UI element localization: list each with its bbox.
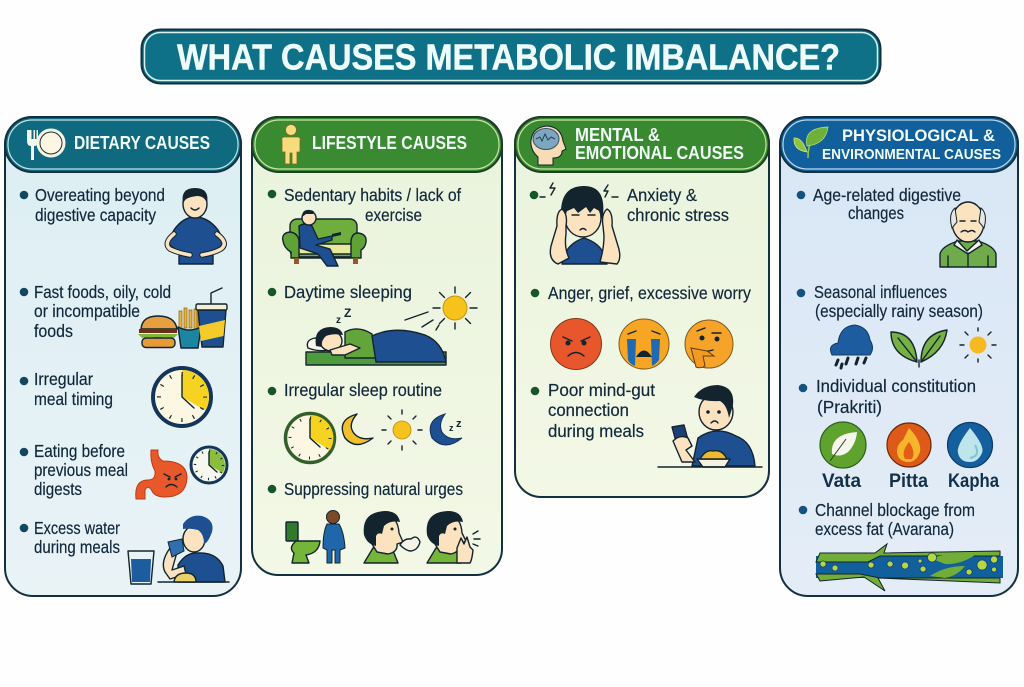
item: fast foods xyxy=(20,282,227,348)
header text: DIETARY CAUSES xyxy=(74,133,210,153)
header: mental and emotional causes xyxy=(515,117,769,172)
label: pitta: Pitta xyxy=(889,471,928,492)
item: eating before digestion: digests xyxy=(34,479,82,499)
icon: head with brain xyxy=(531,126,566,165)
item: irregular meal timing: meal timing xyxy=(34,389,113,409)
item: seasonal influences xyxy=(797,282,996,368)
icon: person standing xyxy=(323,510,345,563)
item: irregular meal timing xyxy=(20,368,211,426)
item: excess water: Excess water xyxy=(34,518,120,538)
item: eating before digestion: Eating before xyxy=(34,441,125,461)
item: sedentary habits: exercise xyxy=(365,205,422,225)
header text: ENVIRONMENTAL CAUSES xyxy=(822,146,1001,163)
item: eating before digestion xyxy=(20,441,227,499)
icon: small clock xyxy=(191,447,227,483)
item: excess water xyxy=(20,516,229,584)
title banner xyxy=(142,30,880,84)
icon: man eating with phone xyxy=(658,385,762,467)
item: fast foods: or incompatible xyxy=(34,301,140,321)
icon: man drinking water xyxy=(158,516,229,582)
item: eating before digestion: previous meal xyxy=(34,460,128,480)
item: individual constitution: (Prakriti) xyxy=(817,397,882,417)
item: age-related changes: changes xyxy=(848,203,904,223)
icon: sun xyxy=(960,328,996,362)
icon: blue moon with z: z xyxy=(449,423,454,433)
item: overeating: digestive capacity xyxy=(35,205,156,225)
icon: green clock xyxy=(286,414,334,462)
icon: sleeping person xyxy=(306,327,446,365)
label: kapha: Kapha xyxy=(948,471,999,492)
icon: man exhaling xyxy=(364,511,420,563)
label: vata: Vata xyxy=(822,471,861,492)
icon: anxious girl xyxy=(540,183,620,264)
icon: blue moon with z: z xyxy=(456,418,462,430)
icon: burger xyxy=(138,316,178,348)
item: individual constitution: Individual constitution xyxy=(816,376,976,396)
icon: angry stomach xyxy=(136,450,187,499)
item: seasonal influences: Seasonal influences xyxy=(814,282,947,302)
icon: toilet xyxy=(286,522,320,563)
icon: man on sofa xyxy=(283,210,366,266)
item: poor mind-gut connection: during meals xyxy=(548,421,644,441)
icon: thinking face xyxy=(685,320,733,368)
item: anger, grief, worry: Anger, grief, excessive worry xyxy=(548,283,751,303)
icon: man covering mouth xyxy=(427,511,480,563)
item: channel blockage: Channel blockage from xyxy=(815,500,975,520)
header text: EMOTIONAL CAUSES xyxy=(575,143,744,163)
icon: glass of water xyxy=(128,551,154,584)
item: sedentary habits xyxy=(268,185,461,266)
item: sedentary habits: Sedentary habits / lack of xyxy=(284,185,461,205)
icon: vata feather xyxy=(820,422,866,468)
header text: PHYSIOLOGICAL & xyxy=(842,126,995,145)
icon: kapha water drop xyxy=(948,422,992,468)
item: overeating: Overeating beyond xyxy=(35,185,165,205)
item: suppressing natural urges: Suppressing natural urges xyxy=(284,479,463,499)
item: fast foods: Fast foods, oily, cold xyxy=(34,282,171,302)
icon: angry face xyxy=(550,318,602,370)
icon: fries xyxy=(178,308,201,348)
item: irregular sleep routine: Irregular sleep routine xyxy=(284,380,442,400)
item: irregular sleep routine xyxy=(268,380,462,462)
item: daytime sleeping: Daytime sleeping xyxy=(284,282,412,302)
text: snore: z xyxy=(336,315,341,326)
item: channel blockage: excess fat (Avarana) xyxy=(815,519,954,539)
item: seasonal influences: (especially rainy season) xyxy=(815,301,983,321)
icon: sun with rays xyxy=(405,287,477,330)
icon: rain cloud xyxy=(830,325,872,368)
header: lifestyle causes xyxy=(252,117,502,172)
icon: clock xyxy=(153,368,211,426)
icon: standing person xyxy=(282,124,300,164)
header: physiological and environmental causes xyxy=(780,117,1018,172)
icon: overeating man xyxy=(167,188,225,264)
header: dietary causes xyxy=(5,117,241,172)
item: poor mind-gut connection: connection xyxy=(548,400,629,420)
item: age-related changes: Age-related digestive xyxy=(813,185,961,205)
item: anxiety and stress: chronic stress xyxy=(627,205,729,225)
header text xyxy=(822,126,1001,163)
icon: small sun xyxy=(382,410,422,450)
item: overeating xyxy=(20,185,225,264)
icon: sprout leaves xyxy=(794,127,828,158)
panel: physiological and environmental causes xyxy=(780,117,1018,596)
header text: LIFESTYLE CAUSES xyxy=(312,133,467,153)
icon: crescent moon xyxy=(342,414,373,444)
item: poor mind-gut connection xyxy=(531,380,762,467)
item: individual constitution xyxy=(799,376,999,492)
title text: WHAT CAUSES METABOLIC IMBALANCE? xyxy=(177,36,840,78)
icon: soft drink cup xyxy=(196,288,227,347)
item: anxiety and stress: Anxiety & xyxy=(627,185,697,205)
item: excess water: during meals xyxy=(34,537,120,557)
panel: dietary causes xyxy=(5,117,241,596)
item: fast foods: foods xyxy=(34,321,73,341)
icon: elderly man xyxy=(940,202,996,267)
item: poor mind-gut connection: Poor mind-gut xyxy=(548,380,655,400)
item: anxiety and stress xyxy=(530,183,729,264)
item: anger, grief, worry xyxy=(531,283,751,370)
item: age-related changes xyxy=(797,185,996,267)
item: suppressing natural urges xyxy=(268,479,480,563)
item: channel blockage xyxy=(799,500,1003,591)
icon: crying face xyxy=(619,319,669,369)
icon: blocked channel xyxy=(816,544,1003,591)
icon: fork and plate xyxy=(27,129,65,160)
item: daytime sleeping: Z xyxy=(344,306,351,320)
panel: lifestyle causes xyxy=(252,117,502,575)
icon: pitta flame xyxy=(887,423,931,467)
header text: MENTAL & xyxy=(575,125,660,145)
icon: two green leaves xyxy=(891,330,947,367)
icon: blue moon with z xyxy=(430,414,462,445)
header text xyxy=(575,125,744,163)
panel: mental and emotional causes xyxy=(515,117,769,497)
item: irregular meal timing: Irregular xyxy=(34,369,93,389)
item: daytime sleeping xyxy=(268,282,477,365)
